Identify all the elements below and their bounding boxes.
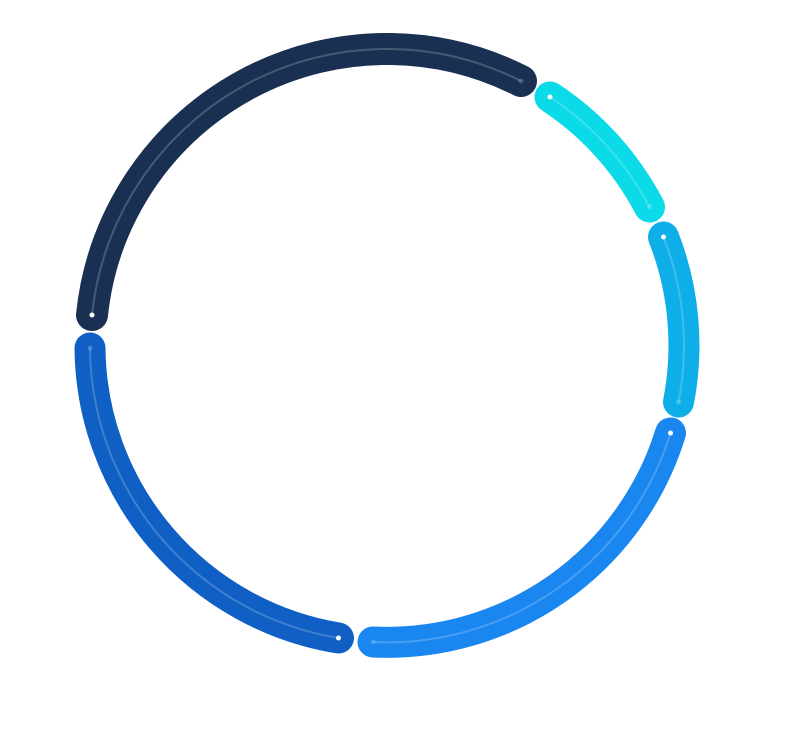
segment: navy arc — [90, 49, 524, 317]
segment: bright blue arc — [370, 430, 673, 644]
segment: cyan arc — [548, 94, 652, 210]
segment: sky blue arc — [661, 234, 684, 404]
segment: royal blue arc — [88, 346, 341, 640]
